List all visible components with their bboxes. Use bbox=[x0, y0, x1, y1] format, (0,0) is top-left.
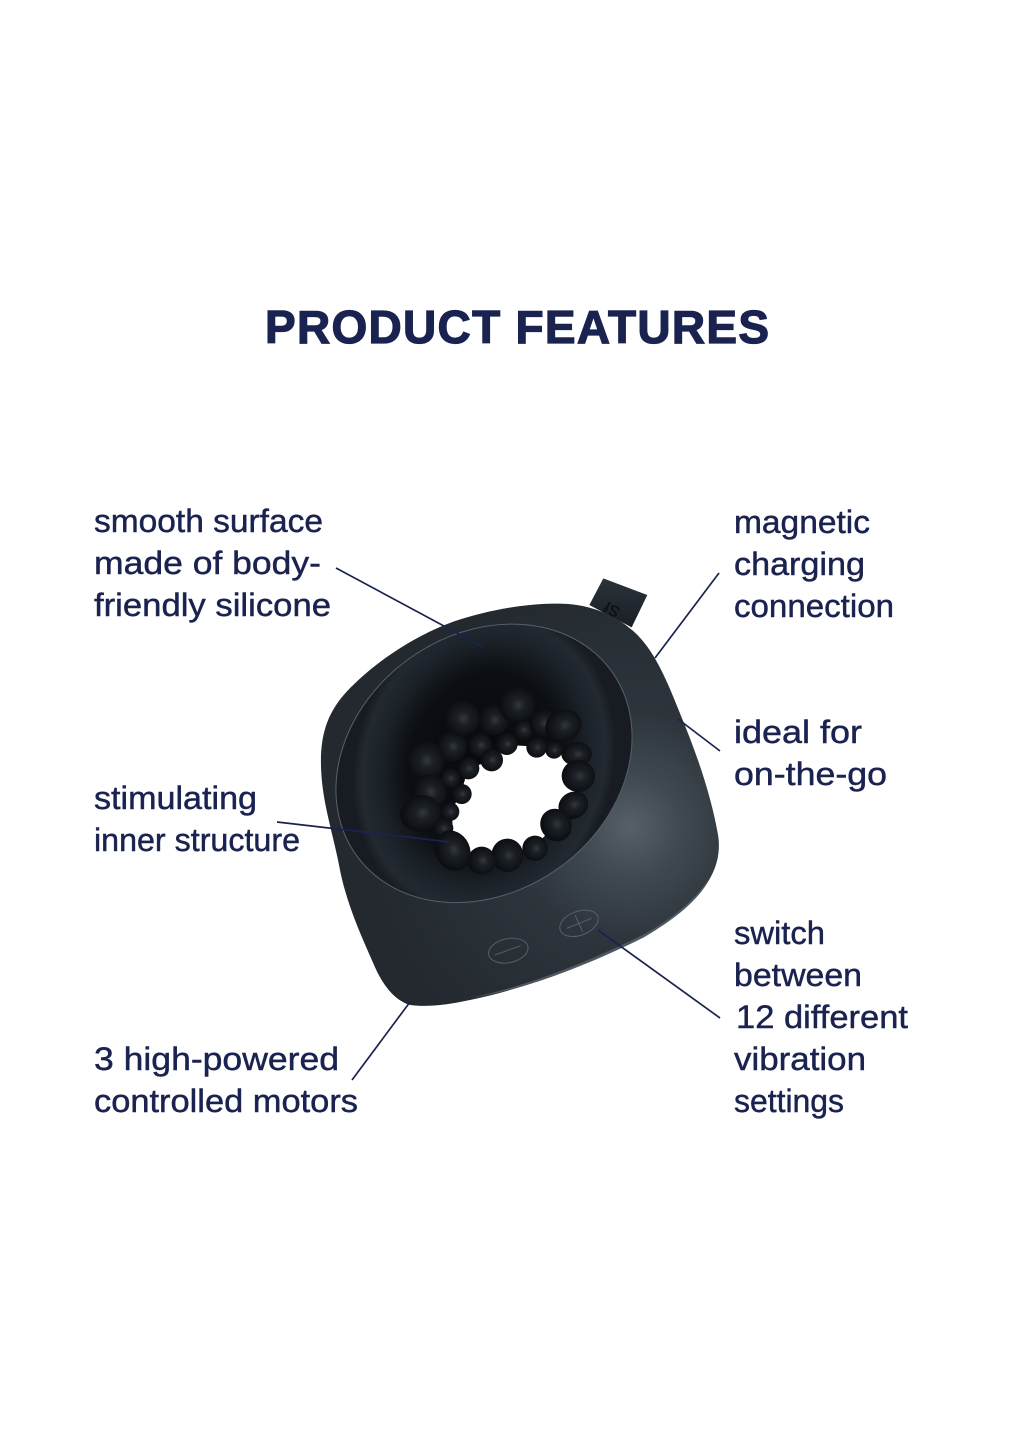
plus button bbox=[556, 905, 602, 941]
callout: inner structure: stimulating bbox=[94, 780, 257, 816]
callout: magnetic charging: connection bbox=[734, 588, 894, 624]
callout: motors: 3 high-powered bbox=[94, 1041, 339, 1077]
callout: smooth surface bbox=[94, 503, 331, 623]
callout: inner structure bbox=[94, 780, 300, 858]
callout: vibration settings: settings bbox=[734, 1083, 844, 1119]
leader line: motors bbox=[352, 1002, 410, 1080]
callout: vibration settings: between bbox=[734, 957, 862, 993]
charging tab: Sf bbox=[601, 597, 623, 620]
callout: on-the-go: ideal for bbox=[734, 714, 862, 750]
callout: vibration settings: switch bbox=[734, 915, 825, 951]
callout: smooth surface: made of body- bbox=[94, 545, 321, 581]
product illustration bbox=[281, 567, 719, 1006]
inner beads bbox=[396, 687, 595, 877]
charging tab bbox=[589, 578, 647, 627]
bottom edge highlight bbox=[470, 875, 712, 998]
ring rim bbox=[281, 567, 687, 960]
callout: magnetic charging: magnetic bbox=[734, 504, 870, 540]
callout: smooth surface: friendly silicone bbox=[94, 587, 331, 623]
leader line: smooth surface bbox=[336, 568, 483, 647]
callout: motors: controlled motors bbox=[94, 1083, 358, 1119]
leader line: vibration settings bbox=[598, 930, 720, 1018]
callout: on-the-go bbox=[734, 714, 887, 792]
callout: motors bbox=[94, 1041, 358, 1119]
callout: vibration settings: vibration bbox=[734, 1041, 866, 1077]
callout: on-the-go: on-the-go bbox=[734, 756, 887, 792]
leader line: on-the-go bbox=[678, 719, 720, 751]
leader line: inner structure bbox=[277, 822, 450, 842]
callout: magnetic charging bbox=[734, 504, 894, 624]
minus button bbox=[486, 935, 530, 967]
centre opening bbox=[452, 745, 578, 859]
device body bbox=[321, 604, 719, 1006]
callout: magnetic charging: charging bbox=[734, 546, 865, 582]
callout: smooth surface: smooth surface bbox=[94, 503, 323, 539]
callout: vibration settings: 12 different bbox=[736, 999, 908, 1035]
callout: inner structure: inner structure bbox=[94, 822, 300, 858]
title: PRODUCT FEATURES bbox=[265, 301, 769, 353]
callout: vibration settings bbox=[734, 915, 908, 1119]
leader line: magnetic charging bbox=[655, 573, 719, 658]
